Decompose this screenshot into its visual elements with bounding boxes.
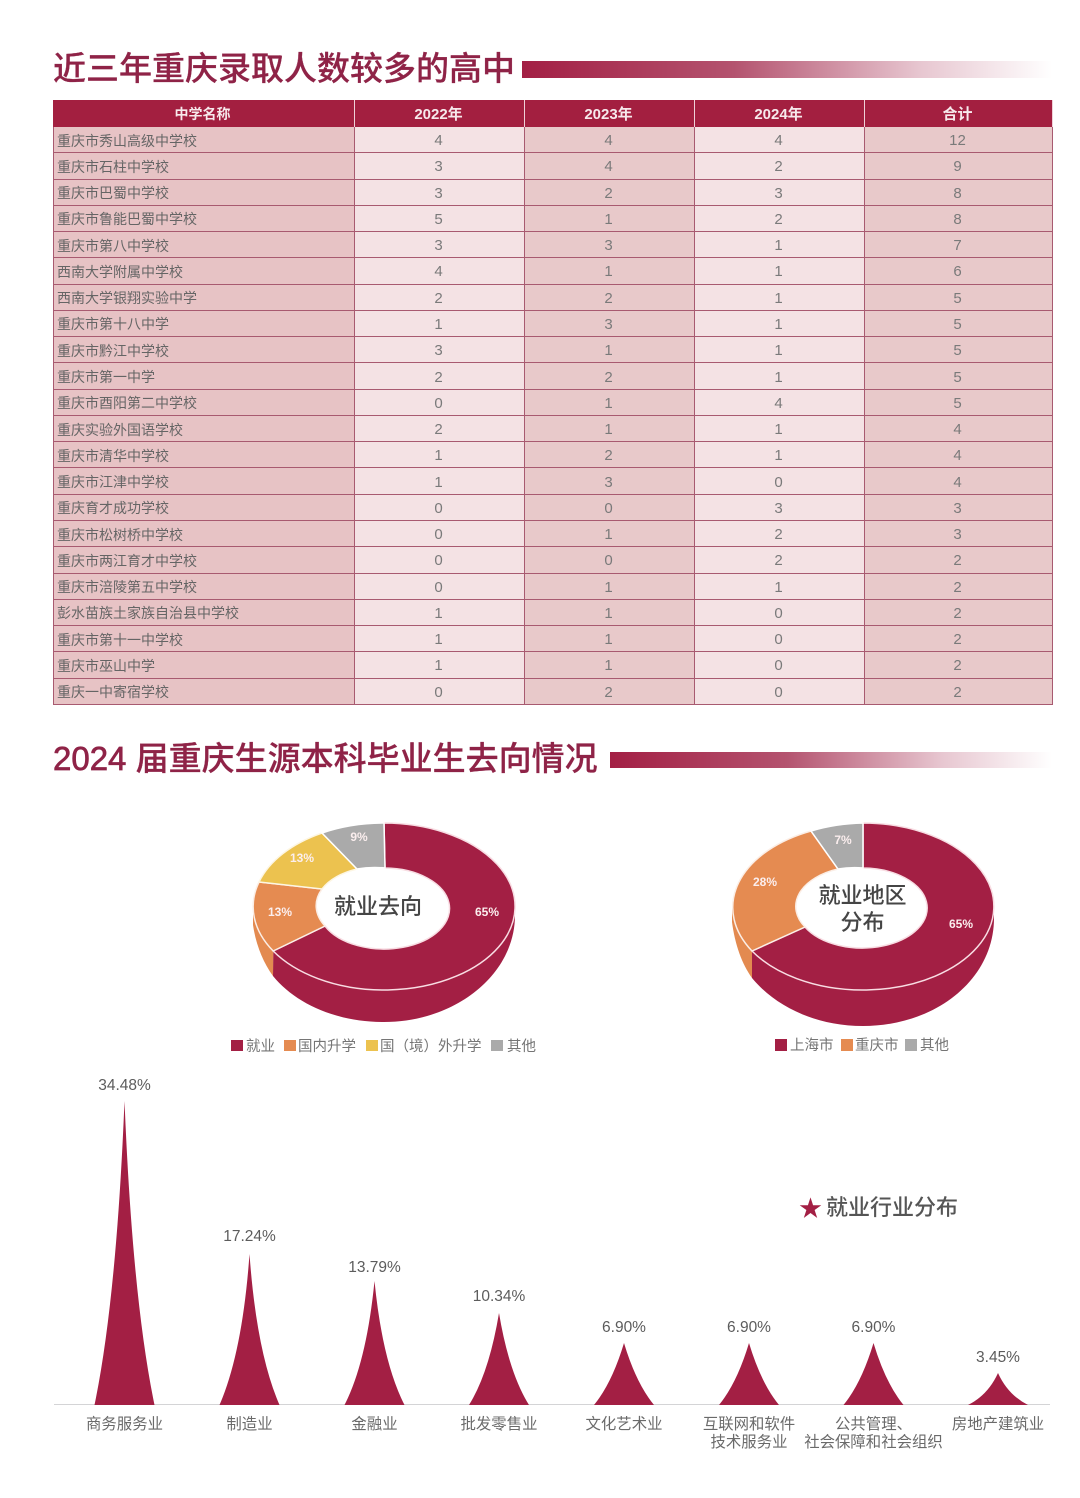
row: 彭水苗族土家族自治县中学校: 彭水苗族土家族自治县中学校	[57, 605, 239, 621]
legend: employment region: 重庆市	[855, 1037, 898, 1054]
spike: 房地产建筑业: 3.45%	[976, 1349, 1020, 1366]
table header row: 中学名称	[174, 106, 230, 122]
row: 重庆市松树桥中学校: 0	[434, 526, 443, 543]
spike: 公共管理、社会保障和社会组织: 6.90%	[852, 1319, 896, 1336]
row: 重庆实验外国语学校: 1	[774, 421, 783, 438]
row: 重庆一中寄宿学校: 2	[953, 684, 962, 701]
title: graduate destinations: 2024 届重庆生源本科毕业生去向情况	[53, 740, 598, 777]
spike: 金融业: 13.79%	[348, 1259, 401, 1276]
row: 重庆市两江育才中学校: 0	[434, 552, 443, 569]
row: 西南大学银翔实验中学: 1	[774, 290, 783, 307]
row: 重庆市清华中学校: 1	[434, 447, 443, 464]
row: 重庆一中寄宿学校: 重庆一中寄宿学校	[57, 684, 169, 700]
row: 重庆市清华中学校: 重庆市清华中学校	[57, 448, 169, 464]
row: 重庆市黔江中学校: 5	[953, 342, 962, 359]
spike: 商务服务业: 商务服务业	[86, 1415, 163, 1433]
row: 重庆市秀山高级中学校: 重庆市秀山高级中学校	[57, 133, 197, 149]
spike: 制造业: 17.24%	[223, 1228, 276, 1245]
row: 重庆市两江育才中学校	[53, 547, 1053, 574]
row: 重庆市涪陵第五中学校: 2	[953, 579, 962, 596]
row: 重庆育才成功学校: 重庆育才成功学校	[57, 500, 169, 516]
row: 重庆市巫山中学: 2	[953, 657, 962, 674]
legend: employment region	[775, 1037, 949, 1054]
row: 重庆实验外国语学校: 2	[434, 421, 443, 438]
spike: 商务服务业: 34.48%	[98, 1077, 151, 1094]
row: 重庆市鲁能巴蜀中学校: 2	[774, 211, 783, 228]
row: 重庆市鲁能巴蜀中学校: 8	[953, 211, 962, 228]
row: 重庆一中寄宿学校: 2	[604, 684, 613, 701]
row: 重庆市酉阳第二中学校: 1	[604, 395, 613, 412]
spike: 互联网和软件技术服务业	[703, 1319, 795, 1451]
row: 重庆市巴蜀中学校: 3	[434, 185, 443, 202]
row: 重庆市巫山中学: 1	[604, 657, 613, 674]
table header row: 2024年	[754, 106, 803, 123]
donut chart: employment destination: 13%	[290, 851, 314, 865]
spike: 批发零售业	[461, 1288, 537, 1433]
spike: 批发零售业: 批发零售业	[461, 1415, 537, 1433]
row: 彭水苗族土家族自治县中学校: 1	[604, 605, 613, 622]
row: 重庆市第十八中学: 1	[774, 316, 783, 333]
row: 重庆市巫山中学: 0	[774, 657, 783, 674]
row: 重庆市黔江中学校: 1	[604, 342, 613, 359]
row: 重庆市涪陵第五中学校: 1	[604, 579, 613, 596]
row: 重庆市石柱中学校: 3	[434, 158, 443, 175]
row: 重庆市巴蜀中学校: 3	[774, 185, 783, 202]
row: 重庆市秀山高级中学校: 4	[434, 132, 443, 149]
table header row: 2022年	[414, 106, 463, 123]
spike: 房地产建筑业: 房地产建筑业	[952, 1415, 1044, 1433]
spike chart: employment industries	[54, 1077, 1050, 1451]
row: 重庆市第十一中学校: 2	[953, 631, 962, 648]
row: 西南大学银翔实验中学: 2	[434, 290, 443, 307]
legend: employment region: 其他	[920, 1037, 949, 1054]
row: 重庆市清华中学校	[53, 442, 1053, 468]
row: 重庆实验外国语学校	[53, 416, 1053, 442]
row: 重庆市松树桥中学校	[53, 521, 1053, 547]
row: 重庆市涪陵第五中学校	[53, 574, 1053, 600]
row: 重庆市石柱中学校: 重庆市石柱中学校	[57, 159, 169, 175]
row: 重庆市黔江中学校: 重庆市黔江中学校	[57, 343, 169, 359]
donut chart: employment destination: 65%	[475, 905, 499, 919]
table header row: 2023年	[584, 106, 633, 123]
row: 重庆市第十一中学校	[53, 626, 1053, 652]
row: 重庆市江津中学校: 1	[434, 474, 443, 491]
row: 重庆育才成功学校: 0	[604, 500, 613, 517]
heading: industry distribution: ★	[799, 1195, 822, 1221]
row: 重庆市巫山中学: 1	[434, 657, 443, 674]
row: 重庆市松树桥中学校: 3	[953, 526, 962, 543]
row: 重庆市江津中学校: 3	[604, 474, 613, 491]
legend: employment destination: 其他	[507, 1038, 536, 1055]
row: 重庆市清华中学校: 1	[774, 447, 783, 464]
donut chart: employment region: 28%	[753, 875, 777, 889]
row: 西南大学附属中学校: 4	[434, 263, 443, 280]
row: 重庆市第十八中学: 重庆市第十八中学	[57, 316, 169, 332]
spike: 金融业	[344, 1259, 404, 1433]
row: 重庆市第八中学校: 重庆市第八中学校	[57, 238, 169, 254]
row: 重庆市第一中学	[53, 363, 1053, 390]
row: 重庆市秀山高级中学校: 4	[774, 132, 783, 149]
spike: 房地产建筑业	[952, 1349, 1044, 1433]
row: 西南大学附属中学校: 1	[774, 263, 783, 280]
row: 重庆育才成功学校	[53, 495, 1053, 521]
row: 重庆市涪陵第五中学校: 0	[434, 579, 443, 596]
row: 重庆市江津中学校: 重庆市江津中学校	[57, 474, 169, 490]
row: 彭水苗族土家族自治县中学校: 1	[434, 605, 443, 622]
title gradient bar	[522, 61, 1052, 78]
legend: employment region: 上海市	[790, 1037, 834, 1054]
heading: industry distribution: 就业行业分布	[826, 1195, 958, 1220]
table header row: 合计	[942, 106, 972, 123]
donut chart: employment region	[732, 823, 994, 1026]
row: 重庆市松树桥中学校: 1	[604, 526, 613, 543]
donut chart: employment region: 分布	[840, 910, 885, 935]
row: 重庆市第一中学: 2	[434, 369, 443, 386]
row: 重庆市巴蜀中学校: 2	[604, 185, 613, 202]
row: 西南大学银翔实验中学	[53, 285, 1053, 311]
row: 重庆市第八中学校: 3	[604, 237, 613, 254]
row: 重庆市第十八中学	[53, 311, 1053, 337]
donut chart: employment region: 65%	[949, 917, 973, 931]
row: 重庆市巴蜀中学校	[53, 180, 1053, 206]
row: 彭水苗族土家族自治县中学校: 0	[774, 605, 783, 622]
row: 重庆市秀山高级中学校: 4	[604, 132, 613, 149]
row: 重庆市巫山中学	[53, 652, 1053, 679]
row: 重庆一中寄宿学校: 0	[774, 684, 783, 701]
row: 重庆市黔江中学校: 3	[434, 342, 443, 359]
row: 重庆市酉阳第二中学校: 0	[434, 395, 443, 412]
donut chart: employment destination: 9%	[350, 830, 368, 844]
row: 重庆一中寄宿学校: 0	[434, 684, 443, 701]
spike: 互联网和软件技术服务业: 技术服务业	[711, 1433, 787, 1451]
row: 重庆市两江育才中学校: 0	[604, 552, 613, 569]
spike: 金融业: 金融业	[351, 1415, 398, 1433]
row: 西南大学附属中学校	[53, 258, 1053, 285]
row: 重庆市清华中学校: 4	[953, 447, 962, 464]
row: 重庆市两江育才中学校: 2	[774, 552, 783, 569]
row: 西南大学附属中学校: 西南大学附属中学校	[57, 264, 183, 280]
spike: 公共管理、社会保障和社会组织: 社会保障和社会组织	[804, 1433, 943, 1451]
table header row	[53, 100, 1053, 127]
spike: 批发零售业: 10.34%	[473, 1288, 525, 1305]
row: 重庆市第十一中学校: 重庆市第十一中学校	[57, 632, 183, 648]
row: 重庆市第八中学校: 1	[774, 237, 783, 254]
row: 重庆市巴蜀中学校: 8	[953, 185, 962, 202]
row: 重庆市涪陵第五中学校: 重庆市涪陵第五中学校	[57, 579, 197, 595]
legend: employment destination: 国（境）外升学	[380, 1037, 482, 1055]
row: 重庆市两江育才中学校: 重庆市两江育才中学校	[57, 553, 197, 569]
donut chart: employment destination: 就业去向	[334, 894, 422, 919]
table: admissions by high school	[53, 100, 1053, 705]
row: 重庆育才成功学校: 3	[774, 500, 783, 517]
spike: 公共管理、社会保障和社会组织: 公共管理、	[835, 1415, 912, 1433]
spike: 公共管理、社会保障和社会组织	[804, 1319, 943, 1451]
row: 重庆市黔江中学校	[53, 337, 1053, 363]
legend: employment destination: 国内升学	[298, 1038, 356, 1055]
row: 重庆市江津中学校: 0	[774, 474, 783, 491]
row: 重庆市第十一中学校: 1	[434, 631, 443, 648]
row: 重庆市第十八中学: 5	[953, 316, 962, 333]
spike: 商务服务业	[86, 1077, 163, 1433]
spike: 制造业	[220, 1228, 280, 1433]
row: 重庆市第一中学: 重庆市第一中学	[57, 369, 155, 385]
row: 重庆市第八中学校: 7	[953, 237, 962, 254]
spike: 文化艺术业	[586, 1319, 662, 1433]
row: 重庆市石柱中学校: 2	[774, 158, 783, 175]
row: 重庆市鲁能巴蜀中学校: 重庆市鲁能巴蜀中学校	[57, 211, 197, 227]
row: 西南大学银翔实验中学: 5	[953, 290, 962, 307]
legend: employment destination: 就业	[246, 1038, 275, 1055]
row: 重庆市鲁能巴蜀中学校: 1	[604, 211, 613, 228]
row: 重庆市鲁能巴蜀中学校: 5	[434, 211, 443, 228]
spike: 互联网和软件技术服务业: 6.90%	[727, 1319, 771, 1336]
row: 重庆市清华中学校: 2	[604, 447, 613, 464]
title gradient bar 2	[610, 752, 1052, 768]
row: 重庆市两江育才中学校: 2	[953, 552, 962, 569]
row: 重庆实验外国语学校: 重庆实验外国语学校	[57, 422, 183, 438]
row: 重庆市石柱中学校	[53, 153, 1053, 180]
spike: 互联网和软件技术服务业: 互联网和软件	[703, 1415, 795, 1433]
row: 重庆育才成功学校: 0	[434, 500, 443, 517]
row: 重庆市涪陵第五中学校: 1	[774, 579, 783, 596]
donut chart: employment destination: 13%	[268, 905, 292, 919]
row: 重庆市秀山高级中学校	[53, 127, 1053, 153]
row: 重庆实验外国语学校: 4	[953, 421, 962, 438]
row: 西南大学附属中学校: 6	[953, 263, 962, 280]
row: 重庆市江津中学校: 4	[953, 474, 962, 491]
row: 重庆市酉阳第二中学校: 4	[774, 395, 783, 412]
row: 重庆市黔江中学校: 1	[774, 342, 783, 359]
row: 重庆一中寄宿学校	[53, 679, 1053, 705]
row: 重庆市巴蜀中学校: 重庆市巴蜀中学校	[57, 185, 169, 201]
row: 重庆市第一中学: 2	[604, 369, 613, 386]
row: 重庆市第八中学校	[53, 232, 1053, 258]
row: 重庆育才成功学校: 3	[953, 500, 962, 517]
row: 重庆市江津中学校	[53, 468, 1053, 495]
row: 重庆市第十八中学: 1	[434, 316, 443, 333]
spike: 制造业: 制造业	[226, 1415, 273, 1433]
row: 重庆市第十一中学校: 0	[774, 631, 783, 648]
row: 重庆市酉阳第二中学校	[53, 390, 1053, 416]
row: 重庆市酉阳第二中学校: 重庆市酉阳第二中学校	[57, 395, 197, 411]
row: 重庆市第十一中学校: 1	[604, 631, 613, 648]
row: 重庆市第一中学: 1	[774, 369, 783, 386]
row: 重庆市酉阳第二中学校: 5	[953, 395, 962, 412]
row: 重庆市松树桥中学校: 2	[774, 526, 783, 543]
row: 重庆市石柱中学校: 9	[953, 158, 962, 175]
title: top high schools: 近三年重庆录取人数较多的高中	[53, 50, 515, 87]
row: 重庆市石柱中学校: 4	[604, 158, 613, 175]
row: 重庆实验外国语学校: 1	[604, 421, 613, 438]
legend: employment destination	[231, 1037, 536, 1055]
row: 重庆市秀山高级中学校: 12	[949, 132, 966, 149]
donut chart: employment region: 就业地区	[818, 883, 907, 908]
row: 彭水苗族土家族自治县中学校: 2	[953, 605, 962, 622]
spike: 文化艺术业: 文化艺术业	[586, 1415, 662, 1433]
row: 重庆市第十八中学: 3	[604, 316, 613, 333]
donut chart: employment destination	[253, 823, 515, 1022]
row: 彭水苗族土家族自治县中学校	[53, 600, 1053, 626]
row: 重庆市松树桥中学校: 重庆市松树桥中学校	[57, 527, 183, 543]
donut chart: employment region: 7%	[834, 833, 852, 847]
row: 西南大学银翔实验中学: 西南大学银翔实验中学	[57, 290, 197, 306]
row: 西南大学附属中学校: 1	[604, 263, 613, 280]
spike: 文化艺术业: 6.90%	[602, 1319, 646, 1336]
row: 重庆市第一中学: 5	[953, 369, 962, 386]
row: 重庆市第八中学校: 3	[434, 237, 443, 254]
row: 重庆市鲁能巴蜀中学校	[53, 206, 1053, 232]
row: 西南大学银翔实验中学: 2	[604, 290, 613, 307]
row: 重庆市巫山中学: 重庆市巫山中学	[57, 658, 155, 674]
